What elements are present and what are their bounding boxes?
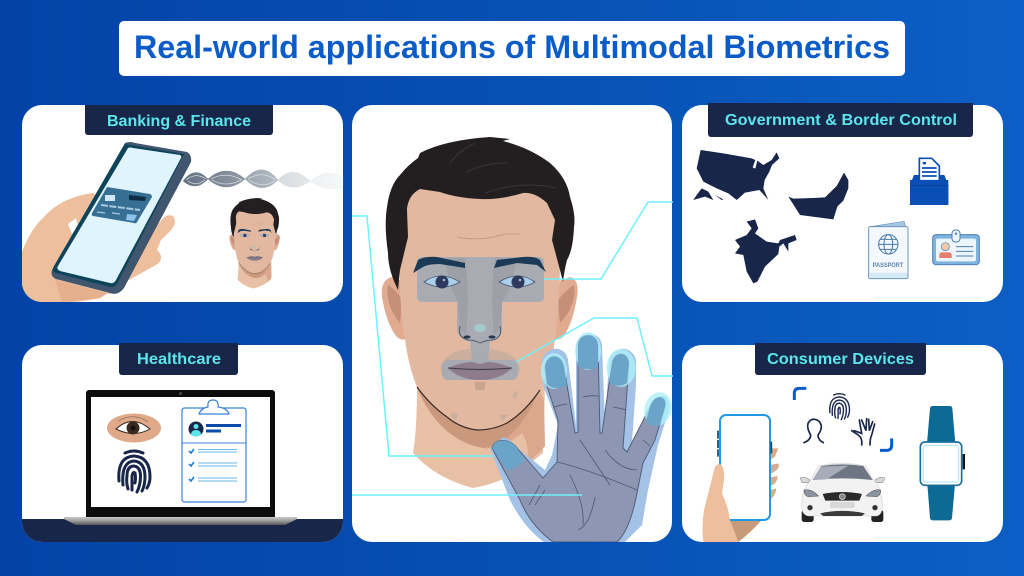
icon: ID card (933, 230, 979, 265)
icon: car (800, 463, 885, 522)
panel: Government & Border Control (682, 103, 1003, 302)
icon: eye (107, 414, 161, 442)
title: Real-world applications of Multimodal Biometrics (134, 29, 890, 65)
illustration: hand with fingerprints (490, 332, 675, 545)
map: USA (693, 150, 779, 200)
panel: Consumer Devices (682, 343, 1003, 542)
heading: Consumer Devices: Consumer Devices (767, 351, 914, 368)
icon: clipboard form (182, 400, 246, 502)
map: India (735, 219, 797, 283)
biometric mask: eyes and nose (417, 257, 544, 360)
fingertips (492, 332, 675, 470)
connector lines (352, 202, 673, 456)
panel: central face and hand (352, 105, 675, 545)
icon: passport (869, 221, 908, 279)
heading: Healthcare: Healthcare (137, 351, 221, 368)
map: UAE (788, 173, 848, 219)
heading: Banking & Finance (85, 105, 273, 135)
icon: hand holding phone (702, 415, 779, 542)
icon: payment card (92, 187, 152, 223)
icon: passport: PASSPORT (873, 263, 904, 269)
heading: Healthcare (119, 343, 238, 375)
heading: Government & Border Control (708, 103, 973, 137)
heading: Consumer Devices (755, 343, 926, 375)
biometric mask: lips (442, 360, 518, 380)
title (119, 21, 905, 76)
icon: ballot box (910, 158, 948, 205)
icon: laptop (64, 390, 297, 525)
icon: smartwatch (920, 406, 965, 520)
icon: scan corners (794, 388, 892, 450)
connector line: palm (352, 494, 582, 496)
panel: Healthcare (22, 343, 343, 542)
icon: hand holding phone (22, 142, 191, 304)
icon: hand outline (852, 419, 875, 445)
icon: fingerprint (830, 394, 849, 420)
icon: voice wave (183, 170, 343, 189)
illustration: face (382, 137, 578, 488)
heading: Government & Border Control: Government & Border Control (725, 112, 957, 129)
panel: Banking & Finance (22, 105, 343, 304)
icon: face outline (804, 419, 823, 443)
biometric mask: mouth surround (440, 348, 520, 374)
icon: fingerprint (119, 451, 150, 492)
heading: Banking & Finance: Banking & Finance (107, 113, 251, 130)
icon: small face (229, 198, 280, 289)
